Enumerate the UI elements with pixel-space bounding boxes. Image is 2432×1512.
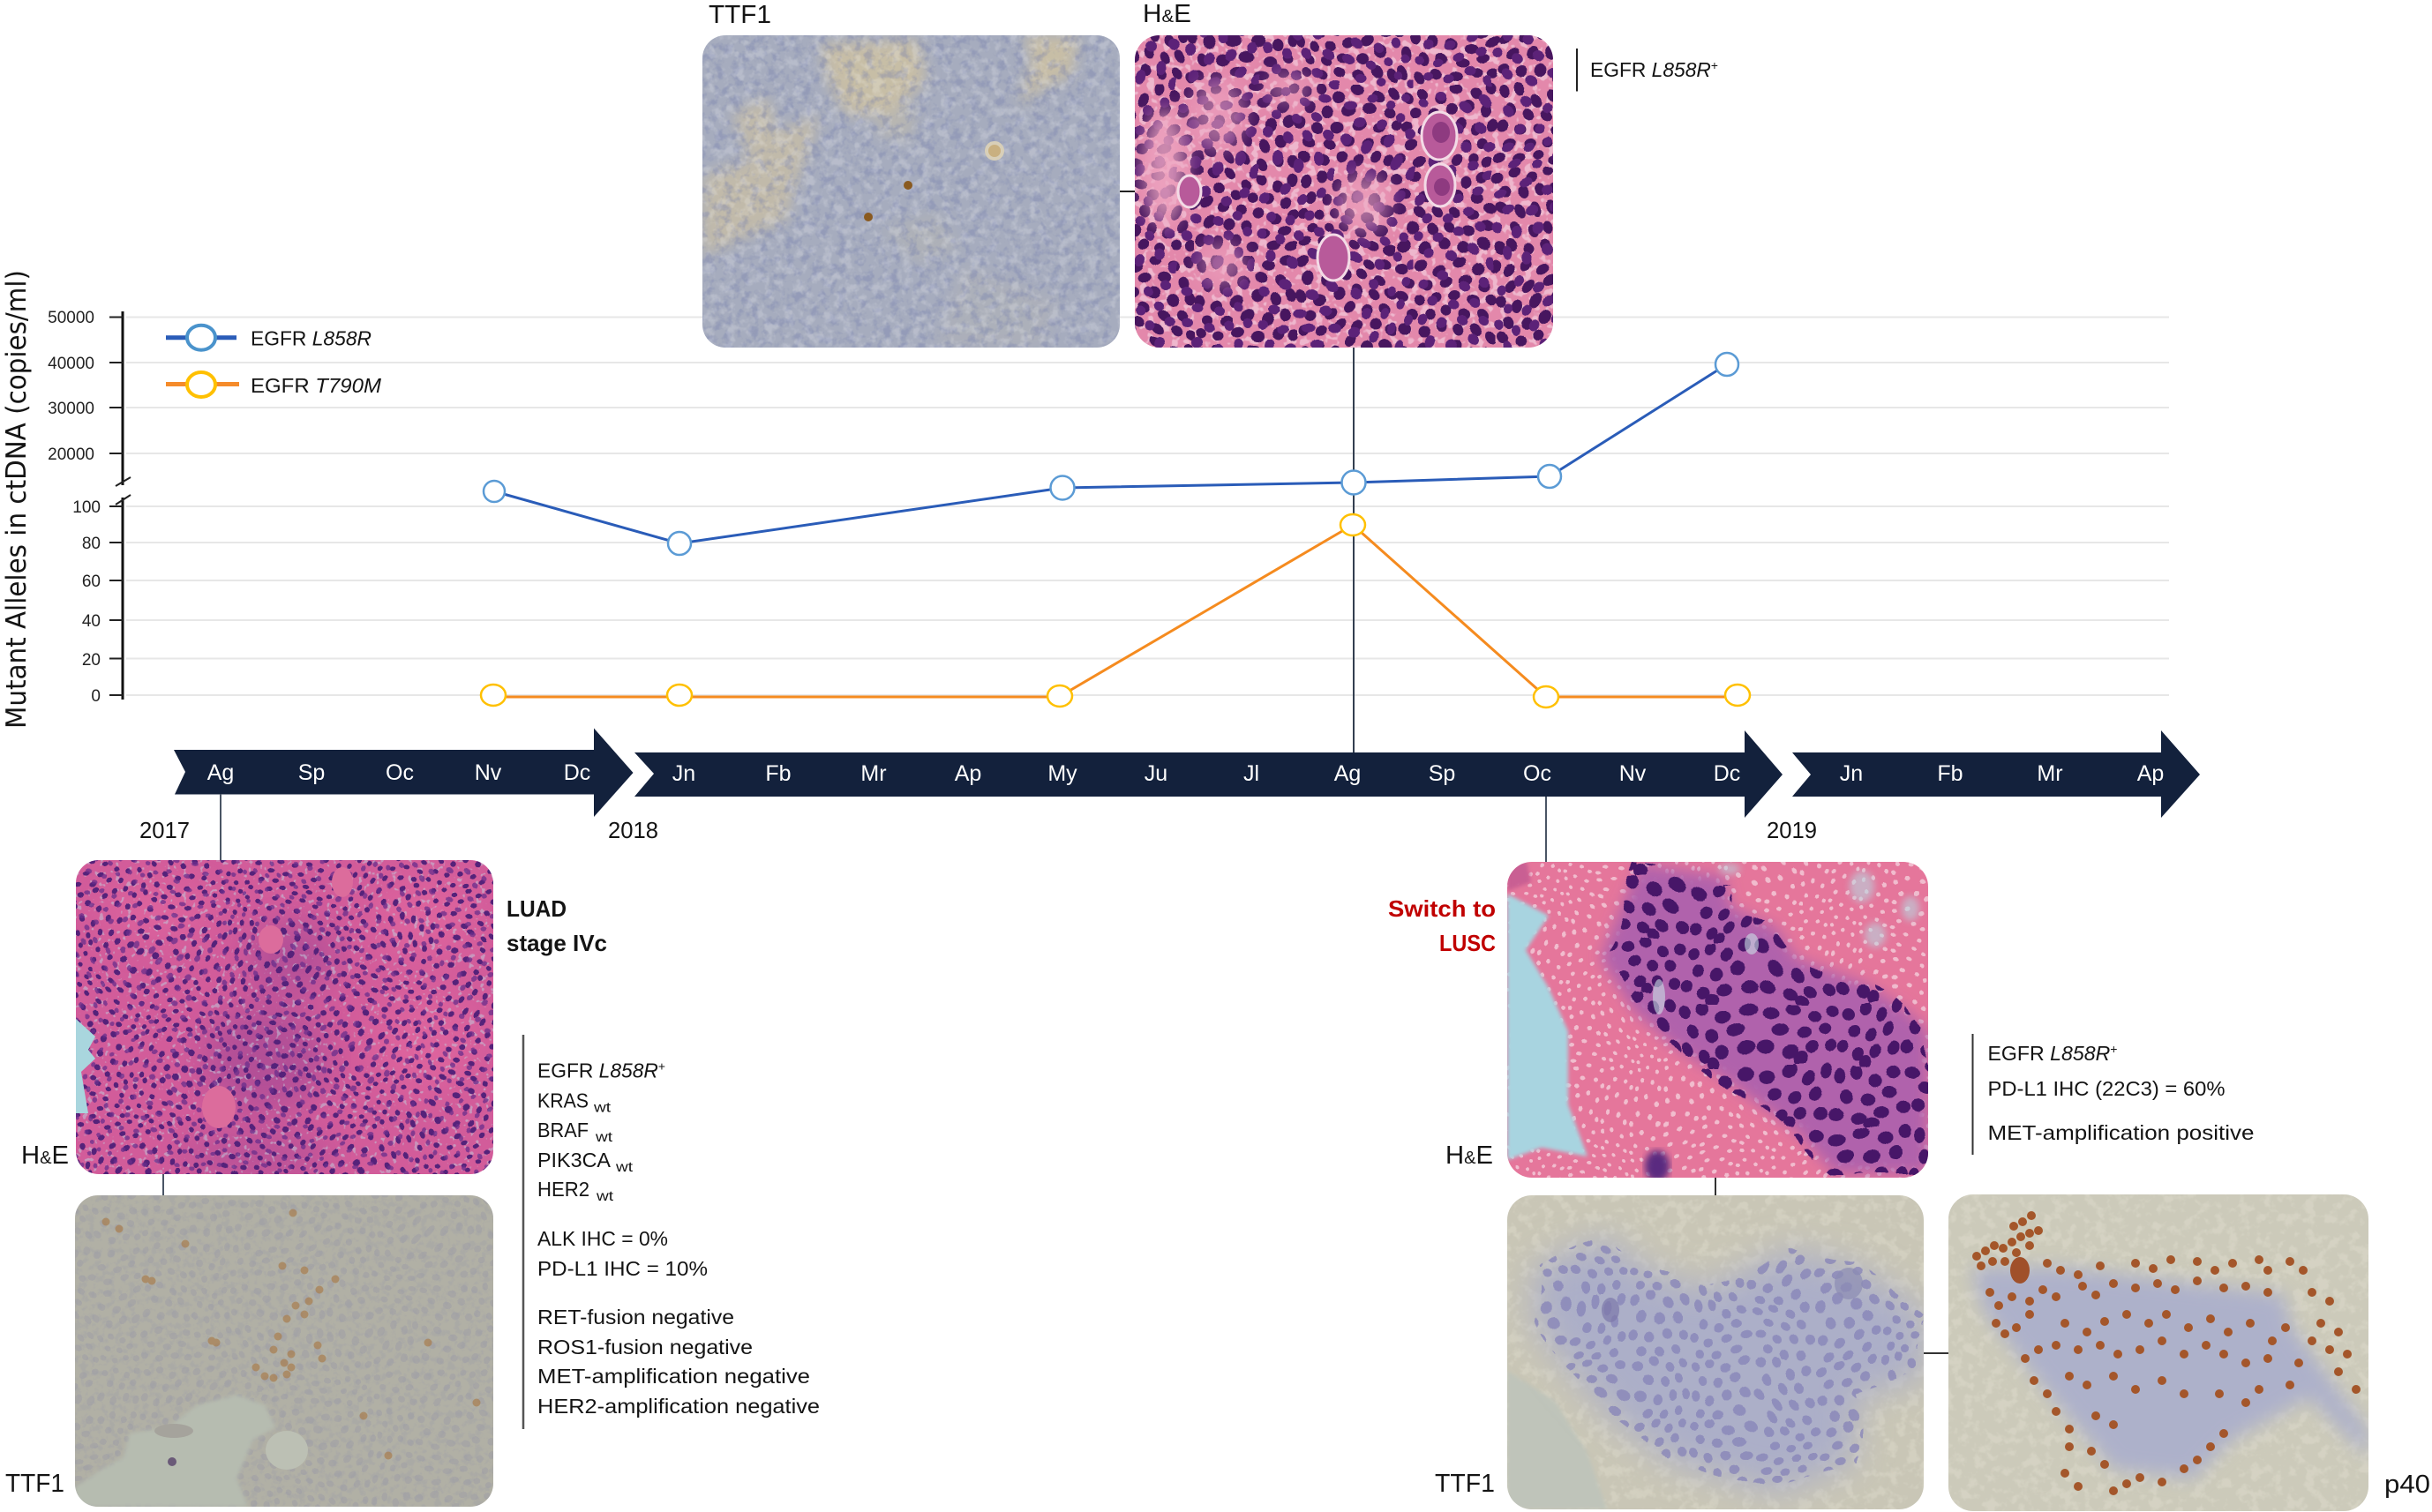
label: TTF1 top: TTF1 [709, 1, 771, 29]
annotation: baseline molecular profile: ALK IHC = 0% [537, 1227, 668, 1250]
panel: LUSC TTF1 micrograph [1507, 1195, 1924, 1509]
annotation: LUSC molecular profile: EGFR L858R [1987, 1042, 2110, 1065]
legend: EGFR L858R: EGFR L858R [251, 326, 372, 349]
annotation: baseline molecular profile: HER2-amplification negative [537, 1395, 820, 1418]
annotation: baseline molecular profile: + [658, 1059, 665, 1073]
y axis with break and tick labels: 30000 [48, 400, 94, 418]
annotation: baseline molecular profile: ROS1-fusion negative [537, 1336, 753, 1359]
label: LUAD stage IVc: LUAD [507, 895, 567, 922]
timeline arrow 2018: Ag [1334, 761, 1361, 786]
annotation: baseline molecular profile: wt [595, 1130, 613, 1145]
annotation: baseline molecular profile: MET-amplification negative [537, 1365, 810, 1388]
timeline arrow 2017: Dc [564, 760, 590, 785]
connector LUSC H&E to TTF1 [1715, 1178, 1716, 1195]
timeline arrow 2019 [1792, 730, 2200, 818]
timeline arrow 2018: Nv [1619, 761, 1647, 786]
y axis with break and tick labels: 20 [82, 651, 101, 670]
label: p40: p40 [2384, 1471, 2430, 1499]
timeline arrow 2017: Sp [298, 760, 325, 785]
timeline arrow 2019: Ap [2137, 761, 2164, 786]
annotation: baseline molecular profile [523, 1035, 820, 1429]
connector LUAD H&E to TTF1 [162, 1174, 164, 1195]
annotation: baseline molecular profile: wt [593, 1101, 612, 1115]
label: LUAD stage IVc: stage IVc [507, 930, 607, 956]
annotation: baseline molecular profile: wt [596, 1189, 614, 1204]
legend [166, 326, 382, 397]
annotation: LUSC molecular profile: + [2110, 1042, 2118, 1056]
connectors from timeline to lower biopsies [221, 794, 1546, 864]
panel: top H&E micrograph [1135, 35, 1553, 348]
timeline arrow 2018: Dc [1714, 761, 1740, 786]
annotation: top EGFR status: + [1711, 58, 1718, 72]
timeline arrow 2018 [634, 730, 1783, 818]
y axis with break and tick labels: 80 [82, 535, 101, 553]
annotation: LUSC molecular profile [1973, 1034, 2254, 1155]
label: TTF1 lower right: TTF1 [1435, 1470, 1495, 1498]
annotation: baseline molecular profile: wt [615, 1160, 634, 1175]
year labels [139, 817, 1817, 843]
annotation: baseline molecular profile: PD-L1 IHC = 10% [537, 1257, 708, 1280]
annotation: LUSC molecular profile: MET-amplification positive [1987, 1121, 2254, 1144]
panel: LUSC H&E micrograph [1507, 862, 1928, 1178]
y axis with break and tick labels: 40 [82, 612, 101, 631]
timeline arrow 2017: Nv [475, 760, 502, 785]
annotation: baseline molecular profile: EGFR L858R [537, 1059, 658, 1082]
annotation: baseline molecular profile: BRAF [537, 1119, 589, 1141]
y axis with break and tick labels [48, 309, 131, 706]
timeline arrow 2019: Mr [2037, 761, 2063, 786]
y axis with break and tick labels: 50000 [48, 309, 94, 327]
label: LUAD stage IVc [507, 895, 607, 956]
timeline arrow 2018: Fb [765, 761, 792, 786]
panel: LUAD TTF1 micrograph [75, 1195, 493, 1507]
label: switch to LUSC: LUSC [1439, 930, 1496, 956]
label: H&E lower left: H&E [21, 1141, 69, 1170]
year labels: 2019 [1767, 817, 1817, 843]
timeline arrow 2019: Fb [1937, 761, 1963, 786]
series: EGFR L858R line and markers [484, 353, 1738, 555]
timeline arrow 2018: Ap [955, 761, 981, 786]
legend: EGFR L858R [166, 326, 372, 350]
timeline arrow 2018: Jn [672, 761, 695, 786]
annotation: baseline molecular profile: HER2 [537, 1178, 589, 1201]
annotation: top EGFR status: EGFR L858R [1590, 58, 1711, 81]
connector: August 2018 biopsy to timeline [1353, 348, 1355, 752]
chart gridlines [126, 318, 2169, 695]
panel: LUAD H&E micrograph [76, 860, 493, 1174]
series: EGFR T790M line and markers [481, 514, 1750, 707]
label: switch to LUSC [1388, 895, 1496, 956]
timeline arrow 2018: Ju [1145, 761, 1167, 786]
annotation: LUSC molecular profile: PD-L1 IHC (22C3) = 60% [1987, 1077, 2226, 1100]
timeline arrow 2019: Jn [1840, 761, 1863, 786]
y axis with break and tick labels: 100 [72, 498, 101, 517]
year labels: 2018 [608, 817, 658, 843]
annotation: top EGFR status [1577, 49, 1718, 92]
connector TTF1 to p40 [1924, 1352, 1948, 1354]
timeline arrow 2018: Mr [860, 761, 887, 786]
annotation: baseline molecular profile: KRAS [537, 1089, 589, 1112]
y axis with break and tick labels: 20000 [48, 445, 94, 464]
year labels: 2017 [139, 817, 190, 843]
label: switch to LUSC: Switch to [1388, 895, 1496, 922]
timeline arrow 2018: My [1047, 761, 1077, 786]
label: H&E lower right: H&E [1445, 1141, 1493, 1170]
y axis with break and tick labels: 0 [91, 687, 101, 706]
y axis with break and tick labels: 40000 [48, 355, 94, 373]
annotation: baseline molecular profile: PIK3CA [537, 1149, 612, 1171]
timeline arrow 2018: Sp [1429, 761, 1455, 786]
label: H&E top: H&E [1143, 0, 1191, 28]
timeline arrow 2017: Oc [386, 760, 414, 785]
legend: EGFR T790M: EGFR T790M [251, 374, 382, 397]
connector between top panels [1120, 191, 1135, 192]
panel: top TTF1 micrograph [702, 35, 1120, 348]
label: TTF1 lower left: TTF1 [5, 1470, 64, 1498]
panel: LUSC p40 micrograph [1948, 1194, 2368, 1511]
y axis with break and tick labels: 60 [82, 573, 101, 591]
legend: EGFR T790M [166, 372, 382, 397]
y-axis title: Mutant Alleles in ctDNA (copies/ml) [1, 270, 33, 729]
timeline arrow 2017: Ag [207, 760, 234, 785]
timeline arrow 2017 [174, 729, 634, 817]
timeline arrow 2018: Jl [1243, 761, 1259, 786]
timeline arrow 2018: Oc [1523, 761, 1551, 786]
annotation: baseline molecular profile: RET-fusion negative [537, 1306, 734, 1329]
